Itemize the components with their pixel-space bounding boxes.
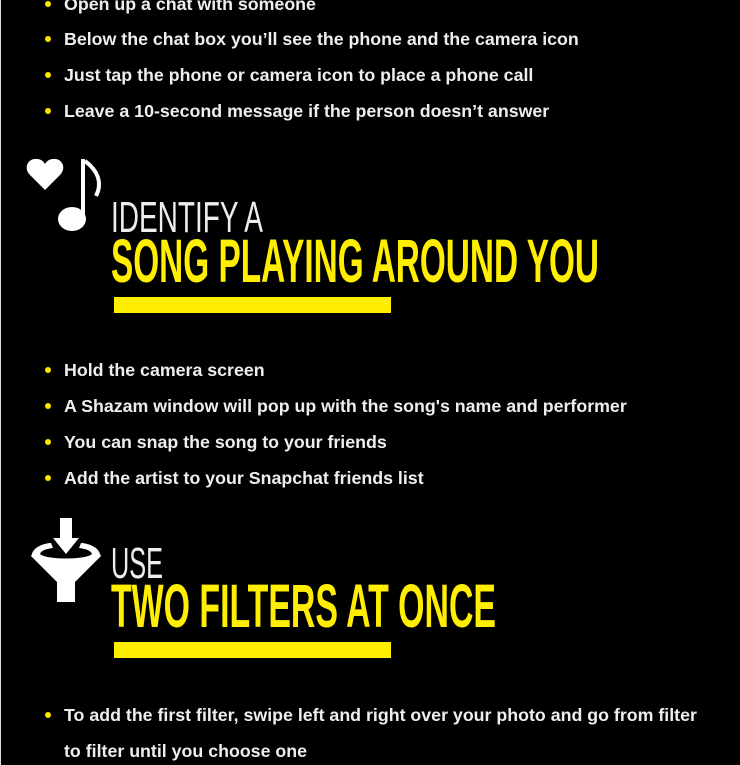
list: identify song steps: You can snap the song to your friends [64,432,387,452]
list: two filters steps: to filter until you choose one [64,741,307,761]
heading: identify a song: IDENTIFY A [111,193,263,242]
list: phone call steps [45,0,579,121]
icon: funnel with arrow [31,518,101,602]
list: two filters steps [45,705,697,761]
list: identify song steps: Add the artist to your Snapchat friends list [64,468,424,488]
icon: heart and music note [26,158,101,231]
heading: identify a song [111,193,599,295]
list: identify song steps [45,360,627,488]
bar: yellow underline 2 [114,642,391,658]
bar: yellow underline 1 [114,297,391,313]
list: phone call steps: Just tap the phone or camera icon to place a phone call [64,65,533,85]
list: two filters steps: To add the first filter, swipe left and right over your photo and go from filter [64,705,697,725]
list: identify song steps: Hold the camera screen [64,360,265,380]
list: phone call steps: Leave a 10-second message if the person doesn’t answer [64,101,549,121]
list: phone call steps: Below the chat box you’ll see the phone and the camera icon [64,29,579,49]
heading: use two filters: USE [111,539,163,588]
list: identify song steps: A Shazam window will pop up with the song's name and performer [64,396,627,416]
